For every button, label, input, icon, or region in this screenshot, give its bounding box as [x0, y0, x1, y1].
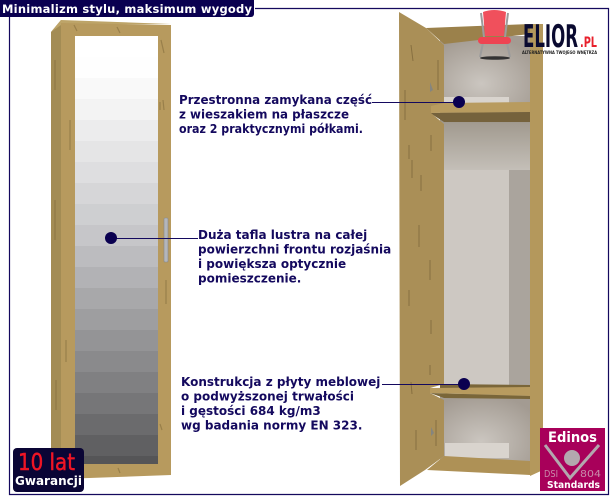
- text block: mirror: powierzchni frontu rozjaśnia: [198, 242, 391, 256]
- marker: upper shelf: [453, 96, 465, 108]
- open door with inner side: [399, 12, 444, 486]
- leader lines: [111, 102, 464, 384]
- text block: closed compartment: Przestronna zamykana część: [179, 93, 372, 107]
- back panel, middle compartment: [440, 112, 532, 170]
- lower shelf: [440, 384, 530, 388]
- right side panel: [530, 24, 543, 476]
- text block: mirror: pomieszczenie.: [198, 272, 301, 286]
- back panel, upper compartment: [440, 36, 532, 104]
- mirror: [75, 36, 158, 464]
- text block: closed compartment: z wieszakiem na płaszcze: [179, 108, 349, 122]
- badge: Edinos standards: Edinos: [548, 430, 597, 446]
- badge: Edinos standards: [540, 428, 605, 491]
- title bar: Minimalizm stylu, maksimum wygody: [2, 2, 252, 16]
- marker: lower shelf: [458, 378, 470, 390]
- door grain: [405, 45, 438, 450]
- hinges: [430, 82, 434, 436]
- badge: Edinos standards: DSI: [544, 469, 558, 480]
- wardrobe front: [61, 23, 171, 479]
- back panel, lower compartment: [440, 394, 532, 462]
- logo suffix: .PL: [580, 35, 597, 51]
- text block: construction: wg badania normy EN 323.: [181, 418, 362, 432]
- text block: mirror: Duża tafla lustra na całej: [198, 228, 367, 242]
- badge: Edinos standards: 804: [580, 469, 601, 480]
- wardrobe top edge: [51, 20, 171, 32]
- logo: Elior.pl: [478, 10, 597, 60]
- text block: closed compartment: oraz 2 praktycznymi półkami.: [179, 122, 363, 136]
- top panel: [426, 24, 530, 44]
- icon: red chair: [478, 10, 511, 60]
- badge: 10 year guarantee: 10 lat: [18, 450, 75, 476]
- light rectangle on back panel: [444, 170, 509, 386]
- text block: construction: Konstrukcja z płyty meblowej: [181, 375, 380, 389]
- marker: mirror: [105, 232, 117, 244]
- wardrobe side panel: [51, 20, 61, 479]
- left wardrobe with mirror, closed: [51, 20, 171, 479]
- badge: 10 year guarantee: Gwarancji: [15, 474, 82, 488]
- text block: construction: o podwyższonej trwałości: [181, 390, 354, 404]
- cabinet bottom: [427, 456, 530, 475]
- wood grain: [55, 25, 166, 473]
- badge: 10 year guarantee: [13, 448, 84, 492]
- badge: Edinos standards: Standards: [547, 480, 600, 491]
- door handle: [164, 218, 168, 262]
- text block: mirror: i powiększa optycznie: [198, 257, 346, 271]
- right wardrobe, open: [399, 12, 543, 486]
- text block: construction: i gęstości 684 kg/m3: [181, 404, 321, 418]
- upper shelf: [430, 102, 530, 113]
